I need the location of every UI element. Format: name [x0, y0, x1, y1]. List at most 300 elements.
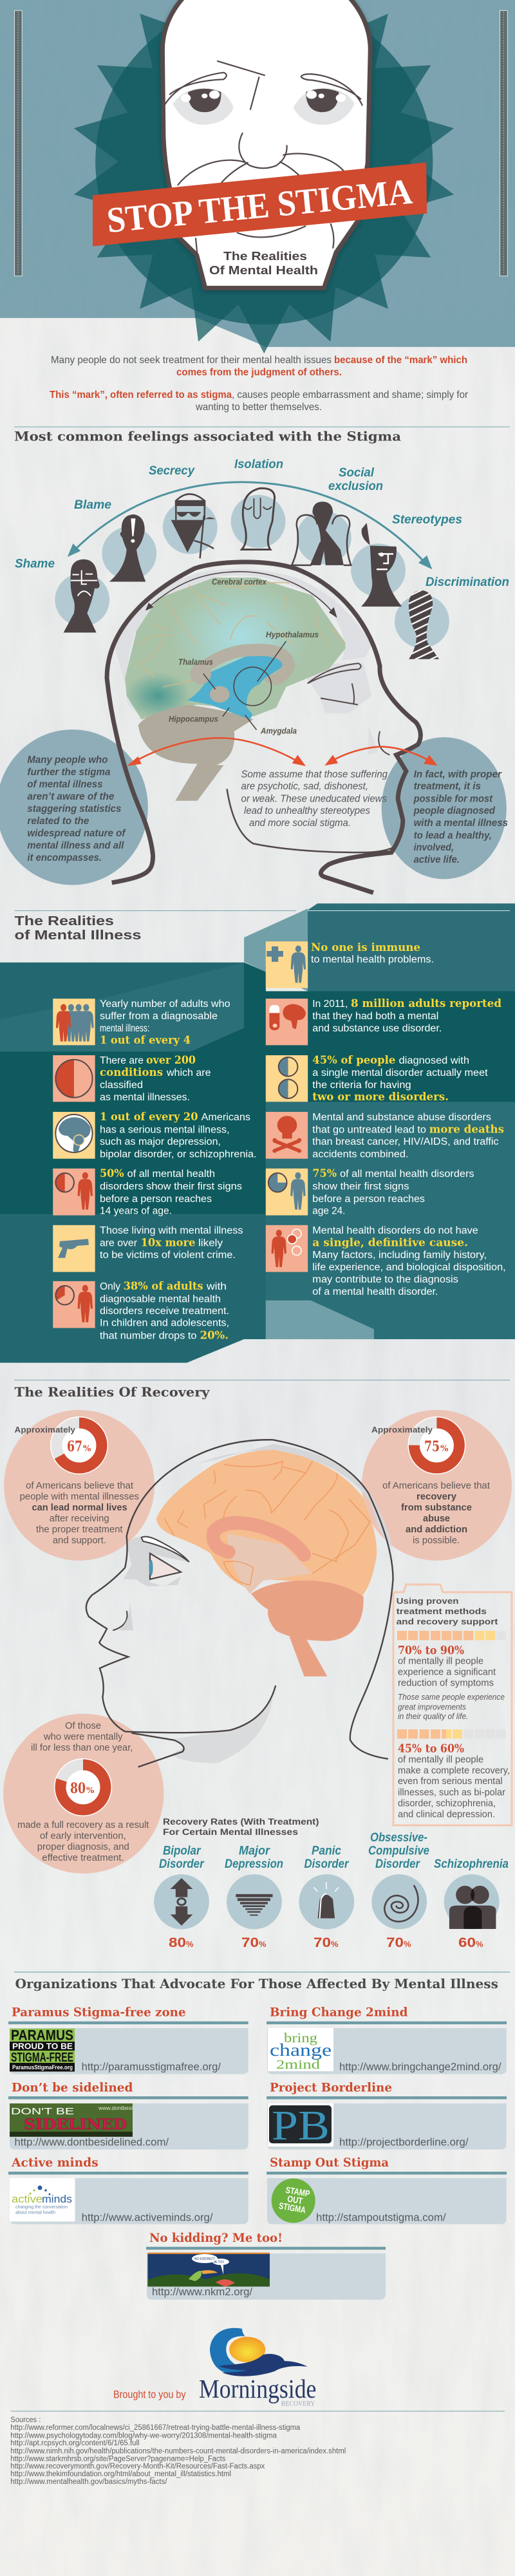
lower circle text: Of those	[65, 1720, 101, 1731]
tile: gun	[53, 1225, 95, 1272]
heading: realities of mental illness: The Realities	[14, 914, 114, 928]
right circle text: and addiction	[406, 1524, 467, 1535]
disorder percentages: %	[476, 1939, 483, 1949]
left circle text: can lead normal lives	[32, 1502, 127, 1513]
brain labels	[169, 578, 319, 735]
illness stats: left column: In children and adolescents,	[100, 1317, 229, 1329]
panel: proven treatment: disorder, schizophrenia,	[398, 1798, 496, 1809]
arc arrow	[71, 482, 429, 567]
logo: stamp out stigma: OUT	[286, 2194, 304, 2206]
illness stats: right column: No one is immune	[311, 941, 420, 954]
panel: proven treatment: even from serious mental	[398, 1776, 503, 1787]
org: No kidding: http://www.nkm2.org/	[152, 2286, 252, 2298]
panel: proven treatment: 45% to 60%	[398, 1742, 464, 1756]
illness stats: left column: 14 years of age.	[100, 1205, 172, 1217]
panel: proven treatment: and recovery support	[397, 1617, 498, 1626]
right callout text: active life.	[414, 854, 460, 865]
heading: recovery rates: Recovery Rates (With Treatment)	[163, 1817, 319, 1827]
figure labels: Secrecy	[149, 464, 195, 478]
right callout text: In fact, with proper	[414, 769, 502, 780]
panel: proven treatment: great improvements	[398, 1702, 466, 1711]
dark bands	[0, 963, 266, 1214]
panel: proven treatment: illnesses, such as bi-polar	[398, 1787, 505, 1798]
left callout text: aren’t aware of the	[27, 791, 115, 802]
org: Project Borderline: Project Borderline	[270, 2080, 392, 2094]
left light flap	[0, 963, 244, 1051]
sources: http://www.recoverymonth.gov/Recovery-Month-Kit/Resources/Fast-Facts.aspx	[10, 2463, 265, 2470]
disorder icons	[154, 1874, 500, 1929]
brain labels: Hypothalamus	[266, 630, 319, 639]
illness stats: left column: 20%.	[200, 1330, 229, 1342]
illness stats: left column: 10x more	[141, 1236, 196, 1249]
org: Bring Change 2mind: http://www.bringchange2mind.org/	[339, 2062, 501, 2073]
left callout text: mental illness and all	[27, 840, 124, 851]
illness stats: left column: Only	[100, 1281, 120, 1292]
feeling circles	[55, 495, 449, 648]
blue crescent wave	[210, 2328, 250, 2374]
logo: paramus: PROUD TO BE	[12, 2041, 73, 2051]
illness stats: right column: accidents combined.	[312, 1149, 408, 1160]
heading: recovery rates: For Certain Mental Illnesses	[163, 1827, 298, 1837]
middle callout text: and more social stigma.	[249, 818, 351, 829]
base band	[0, 963, 515, 1363]
sources: http://www.reformer.com/localnews/ci_25861667/retreat-trying-battle-mental-illness-stigma	[10, 2424, 301, 2432]
brain	[125, 572, 345, 801]
figure labels	[15, 458, 509, 589]
disorder labels: Major	[239, 1845, 271, 1858]
lower circle text: effective treatment.	[42, 1852, 124, 1863]
right circle text: from substance	[401, 1502, 472, 1513]
logo: sidelined: DON'T BE	[11, 2106, 74, 2117]
donut: 75 percent: %	[440, 1444, 449, 1454]
logo: paramus: PARAMUS	[11, 2027, 73, 2044]
illness stats: right column: two or more disorders.	[312, 1091, 449, 1104]
illness stats: right column: to mental health problems.	[311, 954, 434, 965]
right circle text: of Americans believe that	[382, 1480, 491, 1491]
left circle text: the proper treatment	[36, 1524, 123, 1535]
illness stats: left column: such as major depression,	[100, 1136, 221, 1147]
illness stats: left column: 1 out of every 4	[100, 1034, 191, 1047]
figure labels: Shame	[15, 558, 55, 570]
disorder percentages: 70	[241, 1935, 259, 1950]
panel: proven treatment	[393, 1584, 512, 1825]
illness stats: left column: with	[206, 1281, 227, 1292]
sources: http://apt.rcpsych.org/content/6/1/65.full	[10, 2440, 140, 2447]
sources: http://www.starkmhrsb.org/site/PageServer?pagename=Help_Facts	[10, 2455, 226, 2463]
disorder labels: Depression	[225, 1857, 283, 1871]
illness stats: left column: There are	[100, 1055, 144, 1066]
org: Stamp Out Stigma: Stamp Out Stigma	[270, 2156, 389, 2170]
icon: spiral	[384, 1885, 418, 1922]
illness stats: right column: and substance use disorder.	[312, 1023, 442, 1034]
sources: Sources :	[10, 2416, 41, 2424]
sources: http://www.mentalhealth.gov/basics/myths-facts/	[10, 2478, 167, 2486]
intro text: because of the “mark” which	[334, 355, 467, 366]
sun	[229, 2336, 265, 2362]
illness stats: left column: Americans	[201, 1112, 250, 1123]
org: Bring Change 2mind: Bring Change 2mind	[270, 2006, 408, 2020]
figure labels: Stereotypes	[392, 513, 462, 527]
disorder percentages: %	[404, 1939, 411, 1949]
right circle text	[382, 1480, 491, 1546]
org: Active minds: http://www.activeminds.org/	[82, 2212, 213, 2223]
logo: active minds: about mental health	[15, 2210, 55, 2215]
lower circle text: who were mentally	[43, 1731, 123, 1742]
intro text: Many people do not seek treatment for their mental health issues	[51, 355, 332, 366]
org: Bring Change 2mind	[267, 2006, 507, 2074]
logo: Morningside	[113, 2328, 316, 2407]
heading: realities of mental illness	[14, 914, 142, 943]
progress squares 70-90	[397, 1631, 506, 1641]
org: Paramus	[8, 2006, 248, 2074]
skull shadow	[198, 1444, 391, 1548]
banner title: STOP THE STIGMA	[105, 172, 415, 241]
illness stats: right column: a single mental disorder actually meet	[312, 1067, 488, 1078]
right callout text: with a mental illness	[414, 818, 508, 829]
illness stats: left column: mental illness:	[100, 1023, 149, 1034]
logo: active minds: active	[12, 2193, 42, 2205]
pink circles	[3, 1410, 512, 1874]
left circle text: and support.	[53, 1535, 106, 1546]
header panel	[0, 0, 515, 353]
tile: 1 in 20 brain	[53, 1112, 95, 1159]
icon: schizophrenia	[449, 1886, 496, 1929]
divider	[14, 426, 510, 428]
panel: proven treatment: in their quality of life.	[398, 1712, 469, 1721]
left circle text: of Americans believe that	[26, 1480, 134, 1491]
logo: bring change: bring	[284, 2030, 318, 2045]
logo: stamp out stigma: STAMP	[285, 2185, 311, 2199]
disorder percentages: %	[186, 1939, 194, 1949]
figure: shame	[64, 559, 100, 632]
intro text: comes from the judgment of others.	[176, 367, 342, 378]
illness stats: left column: of all mental health	[127, 1169, 215, 1180]
illness stats: right column: before a person reaches	[312, 1194, 425, 1205]
illness stats: left column: 1 out of every 20	[100, 1111, 198, 1123]
lower circle text: made a full recovery as a result	[17, 1819, 149, 1830]
middle callout text: or weak. These uneducated views	[241, 794, 387, 805]
illness stats: left column: diagnosable mental health	[100, 1294, 221, 1304]
subtitle: Of Mental Health	[209, 264, 318, 277]
icon: major depression	[236, 1894, 273, 1915]
left callout text: Many people who	[27, 755, 108, 766]
org: Don't be sidelined: http://www.dontbesidelined.com/	[14, 2137, 169, 2148]
figure: blame	[109, 514, 145, 582]
donut: 67 percent: 67	[67, 1438, 82, 1455]
illness stats: right column: more deaths	[429, 1123, 504, 1136]
panel: proven treatment: and clinical depression.	[398, 1809, 495, 1819]
icon: bipolar	[171, 1878, 192, 1926]
logo: paramus: ParamusStigmaFree.org	[12, 2064, 73, 2071]
logo: active minds	[10, 2178, 75, 2221]
logo: active minds: minds	[42, 2193, 72, 2205]
figure: isolation	[242, 488, 275, 549]
logo: sidelined: SIDELINED	[24, 2116, 127, 2133]
illness stats: right column: 45% of people	[312, 1054, 395, 1067]
illness stats: right column: life experience, and biological disposition,	[312, 1262, 506, 1273]
illness stats: left column: Those living with mental illness	[100, 1225, 243, 1236]
illness stats: left column: 38% of adults	[124, 1280, 203, 1293]
org: Stamp Out Stigma	[267, 2156, 507, 2224]
progress squares 45-60	[397, 1729, 506, 1738]
left circle text	[20, 1480, 139, 1546]
panel: proven treatment: Those same people experience	[398, 1693, 505, 1702]
middle callout text	[241, 769, 388, 829]
donut: 75 percent	[407, 1416, 465, 1474]
navy wave	[219, 2354, 308, 2376]
left callout text: it encompasses.	[27, 852, 102, 863]
illness stats: right column: 8 million adults reported	[351, 997, 501, 1010]
illness stats: left column: bipolar disorder, or schizophrenia.	[100, 1149, 256, 1160]
head outline	[86, 1440, 393, 1767]
logo: no kidding: NO KIDDING?!	[194, 2257, 215, 2261]
illness stats: right column: Mental health disorders do not have	[312, 1225, 478, 1236]
intro text: wanting to better themselves.	[195, 402, 322, 413]
feelings illustration	[0, 482, 507, 892]
brain labels: Thalamus	[178, 658, 213, 667]
tile: 45 percent	[266, 1055, 308, 1102]
burst ellipse	[95, 0, 433, 324]
tile: 50 percent	[53, 1169, 95, 1216]
heading: organizations: Organizations That Advocate For Those Affected By Mental Illness	[15, 1977, 498, 1991]
org: Project Borderline	[267, 2080, 507, 2149]
illness stats: right column: of all mental health disorders	[340, 1169, 474, 1180]
panel: proven treatment: of mentally ill people	[398, 1754, 483, 1765]
right callout text: involved,	[414, 842, 454, 853]
tile: 75 percent	[266, 1169, 308, 1216]
red banner	[93, 162, 427, 246]
logo: stamp out stigma: STIGMA	[278, 2200, 306, 2215]
disorder percentages: %	[331, 1939, 339, 1949]
illness stats: right column: age 24.	[312, 1205, 345, 1217]
tile: 8 million pill and brain	[266, 999, 308, 1045]
right callout text: possible for most	[413, 794, 493, 805]
org: No kidding: No kidding? Me too!	[149, 2231, 283, 2245]
panel: proven treatment: treatment methods	[397, 1606, 487, 1616]
logo: paramus: STIGMA-FREE	[11, 2051, 73, 2065]
illness stats: right column: of a mental health disorder.	[312, 1286, 438, 1297]
lower flap	[266, 1301, 374, 1339]
approximately labels: Approximately	[371, 1425, 433, 1434]
tile: skull	[266, 1112, 308, 1159]
left circle text: people with mental illnesses	[20, 1491, 139, 1502]
right callout text: people diagnosed	[413, 805, 496, 816]
logo: paramus	[10, 2027, 75, 2072]
logo: Morningside: RECOVERY	[281, 2400, 315, 2407]
brain labels: Cerebral cortex	[212, 578, 267, 587]
disorder percentages: 70	[386, 1935, 404, 1950]
disorder labels: Obsessive-	[370, 1831, 427, 1845]
heading: recovery rates	[163, 1817, 319, 1837]
illness stats: left column: that number drops to	[100, 1331, 197, 1342]
illness stats: right column	[311, 941, 506, 1297]
donut: 80 percent	[54, 1758, 112, 1816]
illness stats: left column	[100, 999, 256, 1342]
skull shadow	[115, 569, 379, 755]
heading: realities of mental illness: of Mental Illness	[14, 928, 142, 943]
left callout text: widespread nature of	[27, 828, 126, 839]
donut: 80 percent: %	[86, 1786, 95, 1796]
panel: proven treatment: of mentally ill people	[398, 1656, 483, 1667]
logo: no kidding	[147, 2253, 270, 2287]
illness stats: left column: disorders show their first signs	[100, 1181, 242, 1192]
lower circle text	[17, 1720, 149, 1863]
donut: 67 percent: %	[83, 1444, 91, 1454]
illness stats: right column: Mental and substance abuse disorders	[312, 1112, 491, 1123]
illness stats: left column: before a person reaches	[100, 1194, 212, 1205]
middle callout text: Some assume that those suffering	[241, 769, 388, 780]
panel: proven treatment: reduction of symptoms	[398, 1678, 494, 1688]
subtitle	[209, 250, 318, 277]
disorder labels: Bipolar	[163, 1845, 201, 1858]
face features	[164, 61, 362, 255]
logo: stamp out stigma	[272, 2179, 315, 2223]
sources: http://www.nimh.nih.gov/health/publications/the-numbers-count-mental-disorders-in-america/index.shtml	[10, 2448, 346, 2456]
brain labels: Amygdala	[260, 726, 297, 735]
eyes	[173, 88, 355, 125]
tile: 38 percent	[53, 1281, 95, 1328]
figure: stereotypes	[361, 523, 402, 606]
logo: Morningside: Brought to you by	[113, 2389, 186, 2400]
org: Stamp Out Stigma: http://stampoutstigma.com/	[316, 2212, 446, 2223]
head outline	[107, 562, 420, 892]
illness stats: right column: diagnosed with	[399, 1055, 469, 1066]
figure labels: Discrimination	[426, 576, 509, 589]
eye	[113, 1537, 189, 1630]
org: Don't be sidelined	[8, 2080, 248, 2149]
figure: social exclusion	[292, 502, 351, 565]
illness stats: left column: to be victims of violent crime.	[100, 1250, 236, 1261]
illness stats: right column: In 2011,	[312, 999, 348, 1010]
heading: recovery: The Realities Of Recovery	[14, 1384, 211, 1400]
org: Project Borderline: http://projectborderline.org/	[339, 2137, 469, 2148]
middle callout text: are psychotic, sad, dishonest,	[241, 781, 368, 792]
lower right panel	[266, 1102, 515, 1339]
sources	[10, 2416, 346, 2486]
bottom blue circles	[0, 729, 507, 885]
sources: http://www.thekimfoundation.org/html/about_mental_ill/statistics.html	[10, 2470, 231, 2478]
tile: no single cause	[266, 1225, 308, 1272]
tile: over 200 conditions	[53, 1055, 95, 1102]
illness stats: right column: that they had both a mental	[312, 1011, 438, 1022]
brain labels: Hippocampus	[169, 715, 218, 724]
right circle text: abuse	[423, 1513, 450, 1524]
heading: feelings: Most common feelings associated with the Stigma	[14, 429, 401, 444]
lower circle text: of early intervention,	[40, 1830, 126, 1841]
logo: bring change	[268, 2028, 333, 2072]
approximately labels: Approximately	[14, 1425, 75, 1434]
figure labels: Isolation	[234, 458, 283, 471]
flap	[244, 908, 308, 991]
illness stats: right column: the criteria for having	[312, 1080, 411, 1091]
disorder labels	[159, 1831, 509, 1871]
illness stats: left column: as mental illnesses.	[100, 1092, 190, 1103]
logo: sidelined	[10, 2103, 133, 2137]
illness stats: left column: suffer from a diagnosable	[100, 1011, 218, 1022]
red arrows	[130, 738, 434, 764]
upper right panel	[308, 903, 515, 991]
panel: proven treatment: make a complete recovery,	[398, 1765, 510, 1776]
left callout text: related to the	[27, 816, 89, 827]
illness stats: left column: disorders receive treatment.	[100, 1306, 229, 1317]
illness stats: right column: Many factors, including family history,	[312, 1250, 487, 1261]
illness stats: right column: show their first signs	[312, 1181, 409, 1192]
approximately labels	[14, 1425, 433, 1434]
illness stats: left column: over 200	[146, 1054, 196, 1067]
disorder labels: Disorder	[304, 1857, 350, 1871]
illness stats: left column: are over	[100, 1237, 137, 1249]
figure labels: Social	[339, 466, 375, 480]
left callout text: further the stigma	[27, 767, 111, 778]
logo: Morningside: Morningside	[199, 2374, 316, 2403]
brain	[156, 1450, 377, 1677]
disorder percentages: %	[259, 1939, 267, 1949]
lower circle text: proper diagnosis, and	[37, 1841, 129, 1852]
right circle text: is possible.	[413, 1535, 460, 1546]
middle callout text: lead to unhealthy stereotypes	[244, 805, 370, 816]
donut: 67 percent	[50, 1416, 108, 1474]
donut: 75 percent: 75	[424, 1438, 440, 1455]
donut: 80 percent: 80	[70, 1780, 86, 1797]
left callout text: of mental illness	[27, 779, 103, 790]
figure labels: exclusion	[328, 480, 383, 493]
disorder labels: Disorder	[159, 1857, 205, 1871]
illness stats: left column: has a serious mental illness,	[100, 1124, 229, 1136]
lower circle text: ill for less than one year,	[31, 1742, 133, 1753]
org: Paramus: http://paramusstigmafree.org/	[82, 2062, 221, 2073]
figure: discrimination	[409, 590, 439, 659]
logo: bring change: change	[270, 2040, 332, 2060]
disorder percentages: 60	[458, 1935, 476, 1950]
teal header background	[0, 0, 515, 347]
intro text	[50, 355, 469, 413]
tile: no one is immune	[266, 941, 308, 988]
illness stats: left column: classified	[100, 1080, 143, 1091]
panel: proven treatment: Using proven	[397, 1596, 459, 1606]
org: Don't be sidelined: Don’t be sidelined	[12, 2080, 133, 2094]
illness stats: left column: conditions	[100, 1066, 163, 1079]
face head	[162, 0, 370, 288]
illness stats: right column: 75%	[312, 1167, 337, 1180]
sources: http://www.psychologytoday.com/blog/why-we-worry/201308/mental-health-stigma	[10, 2432, 277, 2440]
icon: panic	[314, 1882, 339, 1918]
org: Active minds: Active minds	[11, 2156, 98, 2170]
subtitle: The Realities	[223, 250, 307, 263]
illness stats: left column: which are	[166, 1067, 211, 1078]
left callout text: staggering statistics	[27, 804, 122, 814]
org: Active minds	[8, 2156, 248, 2224]
illness stats: right column: may contribute to the diagnosis	[312, 1274, 458, 1285]
figure: secrecy	[171, 494, 216, 558]
illness stats: left column: Yearly number of adults who	[100, 999, 230, 1010]
tile: 1 in 4	[53, 999, 95, 1045]
burst star	[74, 14, 454, 353]
illness stats: left column: likely	[198, 1237, 223, 1249]
logo: active minds: changing the conversation	[15, 2204, 68, 2210]
face detail	[308, 663, 389, 755]
logo: PB: PB	[272, 2102, 330, 2149]
left callout text	[27, 755, 126, 863]
logo: sidelined: www.dontbesi	[98, 2105, 133, 2111]
disorder percentages: 80	[169, 1935, 186, 1950]
right callout text: treatment, it is	[414, 781, 481, 792]
disorder percentages	[169, 1935, 483, 1950]
org: Paramus: Paramus Stigma-free zone	[12, 2006, 186, 2020]
logo: no kidding: ME TOO!	[214, 2261, 224, 2264]
intro text: , causes people embarrassment and shame; simply for	[232, 390, 469, 400]
disorder labels: Compulsive	[368, 1845, 429, 1858]
org: No kidding	[146, 2231, 386, 2300]
